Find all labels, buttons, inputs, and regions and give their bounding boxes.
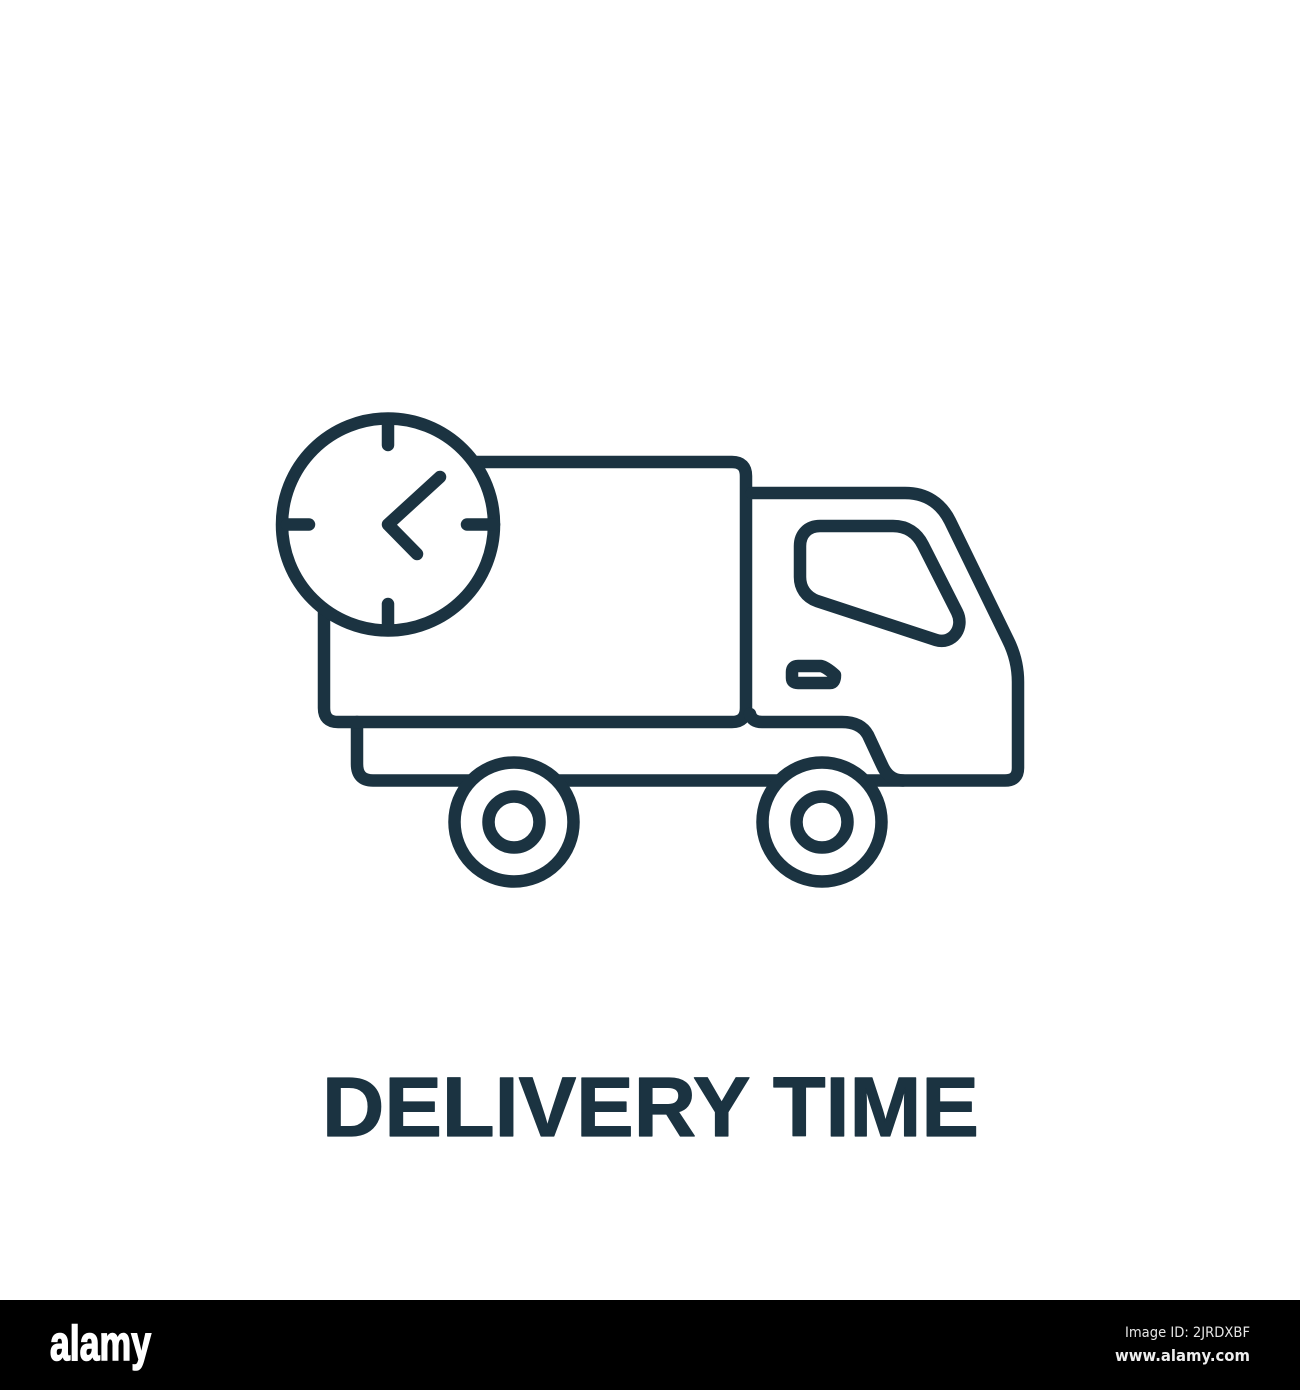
website: www.alamy.com xyxy=(1115,1346,1250,1365)
cab window xyxy=(800,526,959,641)
icon: delivery truck with clock xyxy=(282,418,1018,882)
footer bar xyxy=(0,1300,1300,1390)
chassis xyxy=(357,722,903,780)
clock xyxy=(282,418,494,630)
front wheel xyxy=(762,762,882,882)
rear wheel xyxy=(454,762,574,882)
truck cab xyxy=(750,493,1018,780)
logo: alamy: alamy xyxy=(50,1317,151,1371)
title: DELIVERY TIME xyxy=(322,1060,979,1154)
image id: Image ID: 2JRDXBF xyxy=(1125,1325,1250,1341)
cargo box xyxy=(324,462,746,722)
door handle xyxy=(792,666,835,683)
